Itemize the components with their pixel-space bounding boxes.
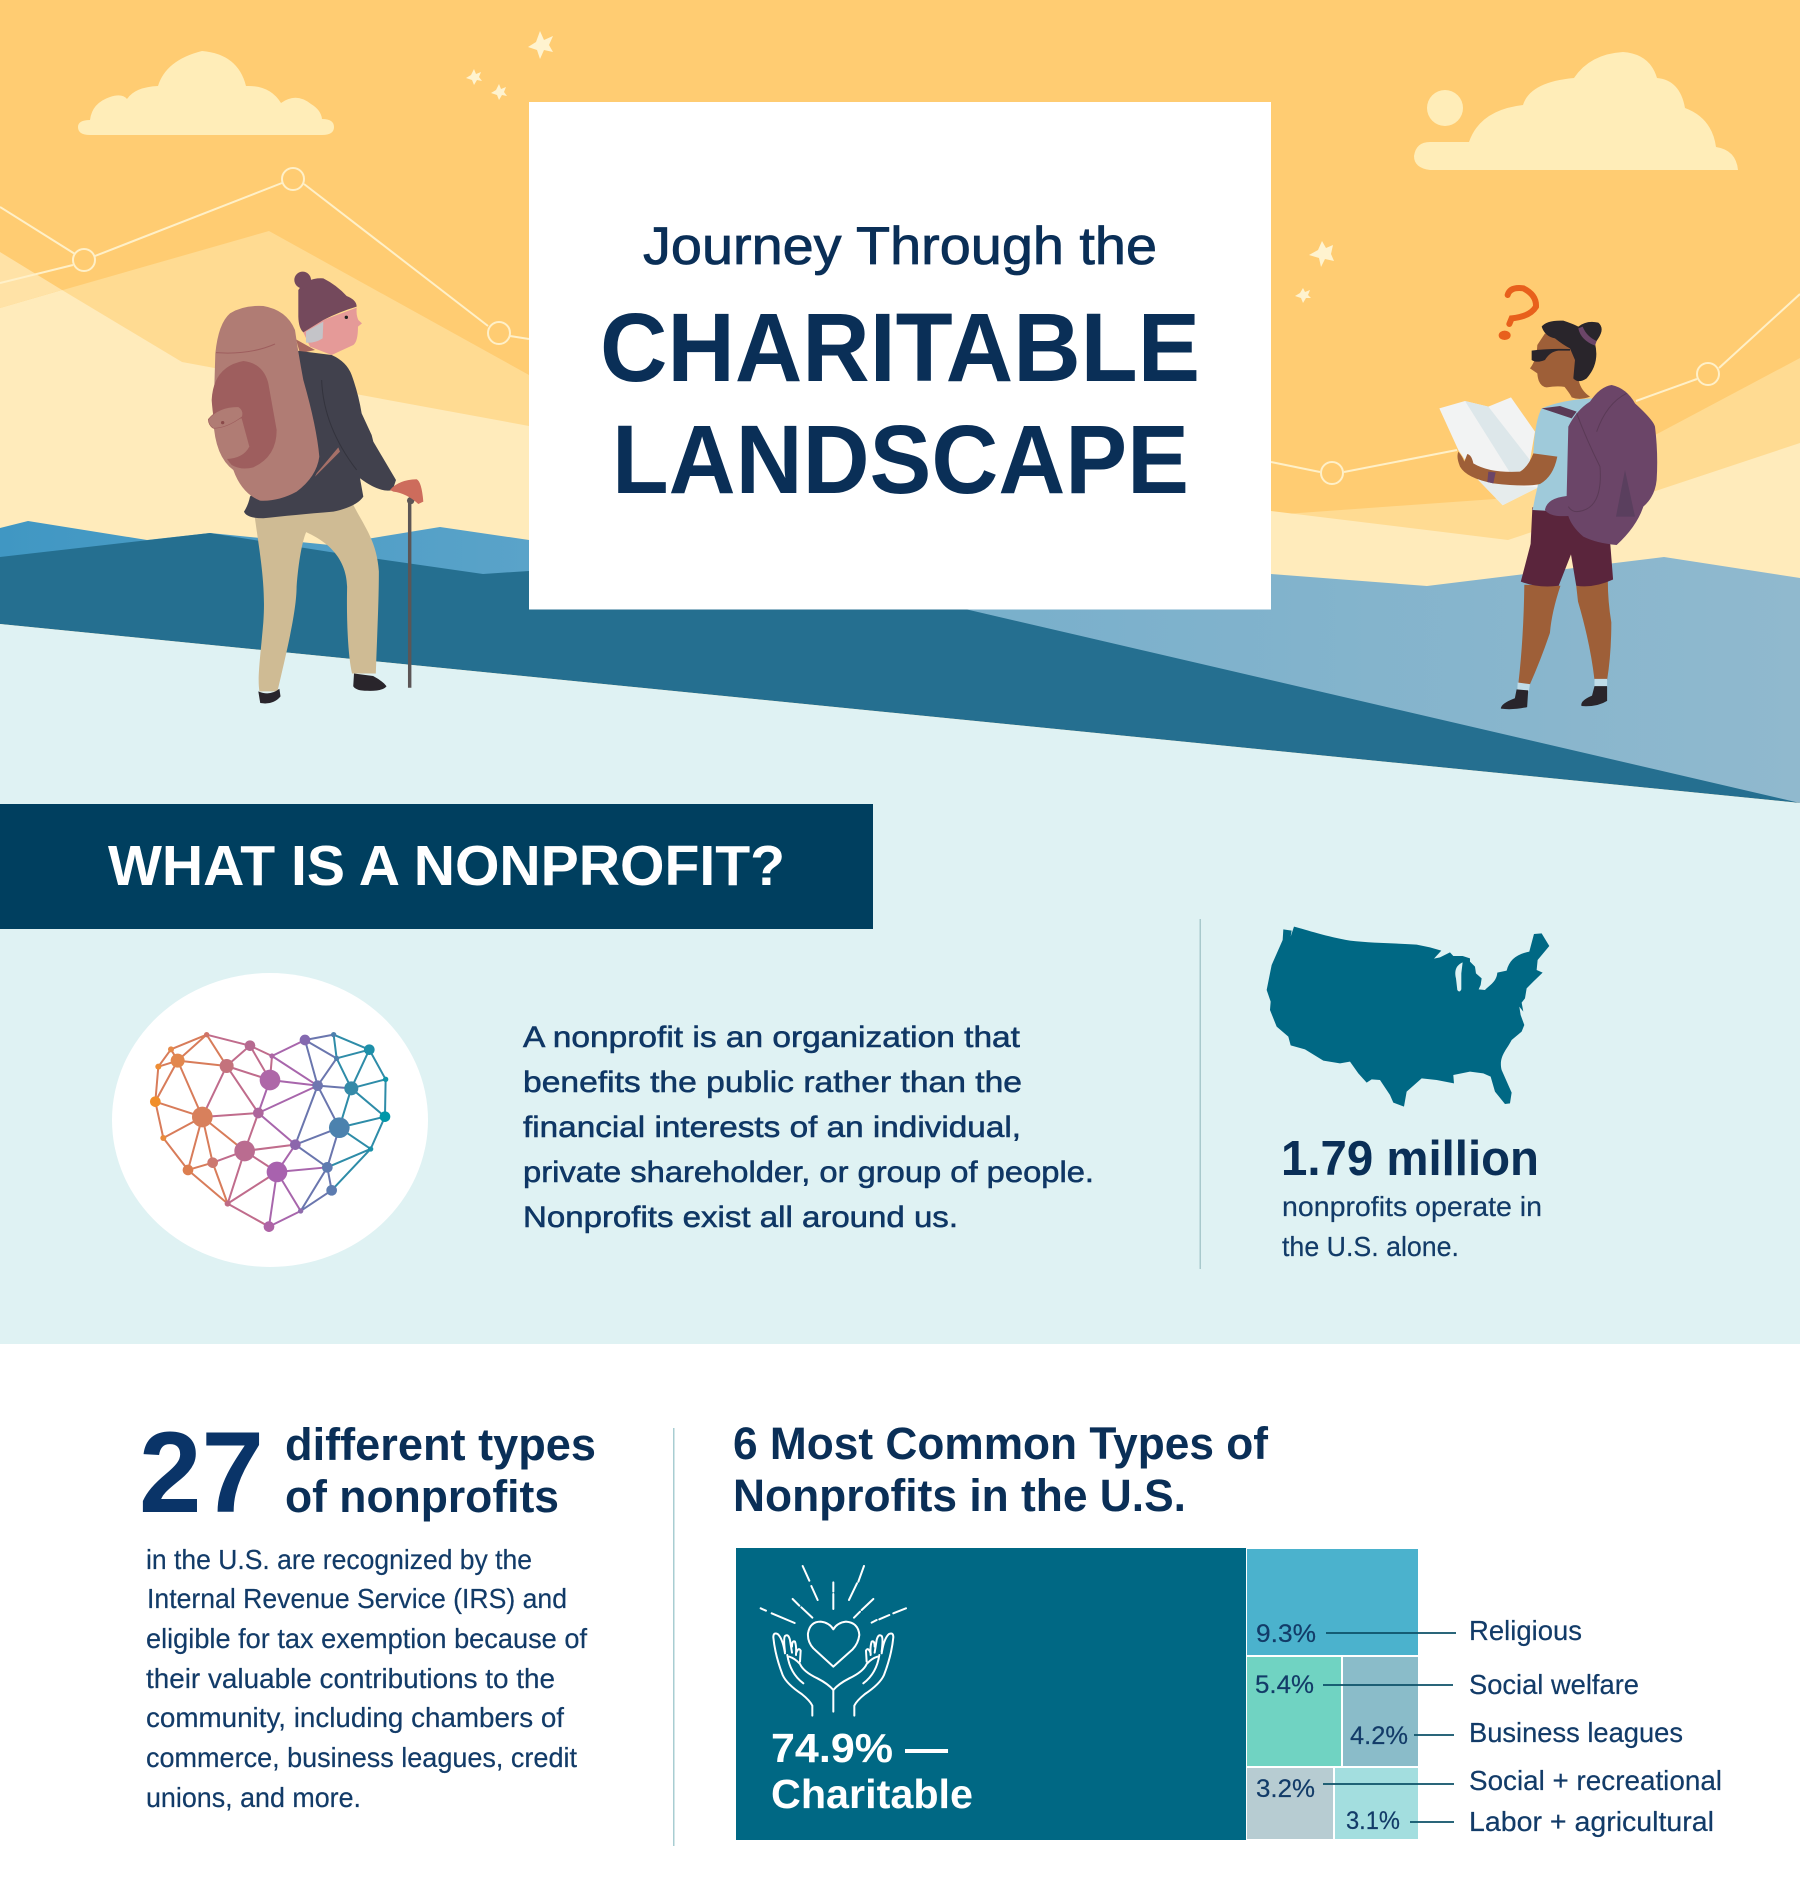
text block: IRS recognition: community, including chambers of xyxy=(146,1702,564,1733)
chart lines across sky xyxy=(0,168,1800,484)
block: business leagues: 4.2% xyxy=(1350,1722,1408,1750)
map xyxy=(1439,397,1538,505)
bracelet xyxy=(1487,472,1496,483)
purple backpack xyxy=(1545,385,1657,545)
panel: title card xyxy=(529,102,1271,610)
stat: 1.79 million: 1.79 million xyxy=(1281,1132,1539,1186)
stat: 27 different types xyxy=(139,1409,596,1537)
block: religious xyxy=(1247,1549,1418,1655)
block: religious: 9.3% xyxy=(1256,1620,1316,1648)
hair tie xyxy=(1578,327,1597,346)
stat: 1.79 million: nonprofits operate in xyxy=(1282,1191,1542,1222)
jacket seam xyxy=(322,380,357,470)
chart category labels: Religious xyxy=(1469,1615,1582,1646)
stat: 27 different types: 27 xyxy=(139,1409,264,1537)
block: social recreational: 3.2% xyxy=(1256,1775,1315,1803)
icon: network heart in white circle xyxy=(112,973,428,1267)
backpack xyxy=(213,306,319,501)
title line 1: Journey Through the xyxy=(643,217,1157,276)
translucent dune overlap xyxy=(0,252,62,308)
legs and shorts xyxy=(1501,507,1613,709)
stat: 1.79 million: the U.S. alone. xyxy=(1282,1231,1459,1262)
backpack pocket xyxy=(1616,470,1635,517)
panel: hero landscape background xyxy=(0,0,1800,1344)
text block: IRS recognition: Internal Revenue Service (IRS) and xyxy=(147,1583,567,1614)
icon: hands holding heart xyxy=(761,1566,906,1716)
right hand xyxy=(833,1633,893,1716)
beanie xyxy=(294,272,357,332)
legs and cane xyxy=(254,501,411,703)
cane knob xyxy=(407,497,414,504)
chart category labels: Business leagues xyxy=(1469,1717,1683,1748)
chart leader lines xyxy=(1323,1633,1456,1822)
neck xyxy=(1562,378,1590,399)
icon: right cloud and sun xyxy=(1414,52,1738,170)
text block: IRS recognition: eligible for tax exemption because of xyxy=(146,1623,587,1654)
pocket xyxy=(212,361,277,469)
arm xyxy=(1457,452,1557,485)
chest strap xyxy=(315,447,340,477)
block: business leagues xyxy=(1343,1657,1418,1766)
stat: 27 different types: different types xyxy=(285,1419,596,1470)
block: charitable: Charitable xyxy=(771,1771,973,1817)
text block: nonprofit definition: Nonprofits exist all around us. xyxy=(523,1201,958,1234)
block: social welfare xyxy=(1247,1657,1341,1766)
text block: nonprofit definition: A nonprofit is an organization that xyxy=(523,1021,1021,1054)
block: labor agricultural: 3.1% xyxy=(1346,1807,1400,1835)
backpack details xyxy=(1568,393,1627,512)
heading: 6 most common types: 6 Most Common Types of xyxy=(733,1418,1269,1469)
far dune layer xyxy=(0,231,1800,620)
pouch flap xyxy=(208,407,243,428)
block: social recreational xyxy=(1247,1768,1333,1839)
text block: IRS recognition: in the U.S. are recognized by the xyxy=(146,1544,532,1575)
block: social welfare: 5.4% xyxy=(1255,1671,1314,1699)
heading band: what is a nonprofit: WHAT IS A NONPROFIT? xyxy=(108,834,785,898)
far blue hills xyxy=(0,521,529,620)
chart category labels: Labor + agricultural xyxy=(1469,1806,1714,1837)
upper body, map and backpack xyxy=(1439,288,1657,545)
title line 2: CHARITABLE xyxy=(600,293,1200,402)
text block: nonprofit definition: benefits the public rather than the xyxy=(523,1066,1022,1099)
glove xyxy=(390,479,423,504)
chart: treemap of nonprofit types xyxy=(736,1548,1418,1840)
grey hair xyxy=(306,322,323,343)
heading band: what is a nonprofit xyxy=(0,804,873,929)
chart category labels xyxy=(1469,1615,1722,1837)
pale foreground ground xyxy=(0,624,1800,1344)
text block: IRS recognition xyxy=(146,1544,587,1813)
divider xyxy=(1200,919,1201,1269)
pale blue slope xyxy=(965,557,1800,803)
hair xyxy=(1542,321,1602,381)
divider xyxy=(673,1428,674,1846)
icon: stars xyxy=(466,31,1334,303)
Lake Michigan xyxy=(1455,962,1463,992)
text block: IRS recognition: commerce, business leagues, credit xyxy=(146,1742,577,1773)
icon: map of the United States xyxy=(1267,927,1549,1107)
backpack strap xyxy=(1542,406,1577,418)
text block: IRS recognition: unions, and more. xyxy=(146,1782,361,1813)
illustration: hiker with map xyxy=(1439,288,1657,709)
left hand xyxy=(773,1633,833,1716)
shirt xyxy=(1533,398,1593,513)
charitable label: 74.9% — xyxy=(771,1725,948,1771)
radiating rays xyxy=(761,1566,906,1623)
heading: 6 most common types xyxy=(733,1418,1269,1521)
dark teal hill xyxy=(0,533,1800,803)
text block: nonprofit definition xyxy=(523,1021,1094,1234)
block: charitable xyxy=(736,1548,1246,1840)
jacket xyxy=(244,351,396,518)
face xyxy=(303,308,362,355)
text block: nonprofit definition: financial interests of an individual, xyxy=(523,1111,1021,1144)
question mark xyxy=(1499,288,1536,340)
sunglasses xyxy=(1532,349,1570,362)
eye xyxy=(345,316,348,319)
pouch button xyxy=(221,421,224,424)
near dune layer xyxy=(0,290,1800,620)
chart category labels: Social welfare xyxy=(1469,1669,1639,1700)
block: labor agricultural xyxy=(1335,1768,1418,1839)
illustration: hiker with backpack and cane xyxy=(208,272,423,703)
heart nodes xyxy=(150,1032,390,1232)
collar xyxy=(296,339,315,353)
seam xyxy=(216,344,275,353)
stat: 1.79 million xyxy=(1281,1132,1542,1262)
heart outline xyxy=(808,1622,859,1667)
text block: IRS recognition: their valuable contributions to the xyxy=(146,1663,555,1694)
side pouch xyxy=(214,418,249,459)
text block: nonprofit definition: private shareholder, or group of people. xyxy=(523,1156,1094,1189)
face xyxy=(1530,333,1577,388)
icon: left cloud xyxy=(78,51,334,135)
upper body and backpack xyxy=(208,272,423,518)
heading: 6 most common types: Nonprofits in the U.S. xyxy=(733,1470,1186,1521)
title line 3: LANDSCAPE xyxy=(612,405,1189,514)
stat: 27 different types: of nonprofits xyxy=(285,1471,559,1522)
chart category labels: Social + recreational xyxy=(1469,1765,1722,1796)
